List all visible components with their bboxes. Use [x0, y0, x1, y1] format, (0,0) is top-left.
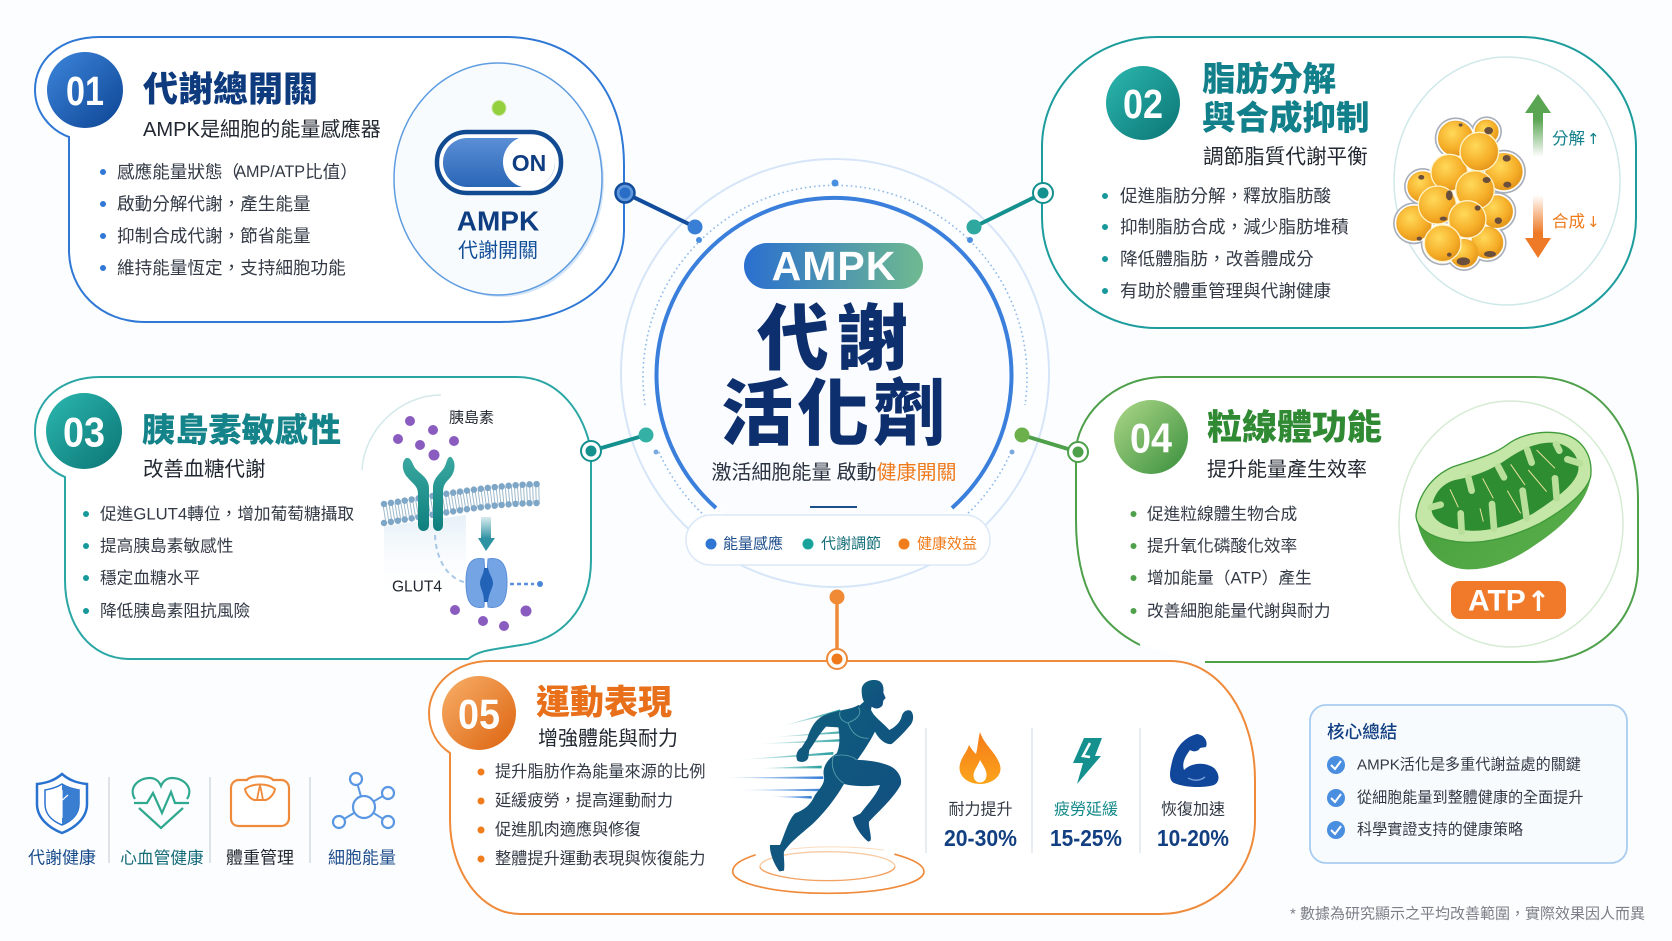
bullets 05	[478, 763, 705, 868]
stat: endurance: 耐力提升	[948, 800, 1013, 818]
panel 04: mitochondria	[1076, 377, 1638, 662]
illustration: AMPK toggle switch: AMPK	[457, 206, 539, 236]
bullets 04	[1130, 504, 1331, 620]
summary row 3: 科學實證支持的健康策略	[1357, 820, 1523, 838]
bullets 04: 增加能量（ATP）產生	[1147, 568, 1312, 588]
illustration: mitochondrion	[1399, 401, 1623, 647]
heading 02	[1202, 60, 1370, 138]
illustration: insulin receptor and GLUT4: GLUT4	[392, 578, 442, 596]
subheading 05: 增強體能與耐力	[538, 727, 678, 750]
heading 03: 胰島素敏感性	[142, 412, 341, 450]
heading 05: 運動表現	[536, 684, 672, 722]
bullets 03: 促進GLUT4轉位，增加葡萄糖攝取	[100, 504, 354, 524]
connector: hub to panel 04	[1014, 428, 1088, 462]
illustration: AMPK toggle switch: 代謝開關	[458, 239, 538, 262]
legend pill: 健康效益	[917, 536, 977, 552]
bullets 05: 延緩疲勞，提高運動耐力	[495, 792, 673, 810]
stat: recovery: 恢復加速	[1161, 800, 1225, 818]
stat: endurance	[944, 732, 1017, 851]
summary row 1: AMPK活化是多重代謝益處的關鍵	[1357, 756, 1581, 774]
bullets 04: 提升氧化磷酸化效率	[1147, 536, 1297, 556]
bullets 05: 提升脂肪作為能量來源的比例	[495, 763, 705, 781]
bullets 02: 抑制脂肪合成，減少脂肪堆積	[1120, 217, 1349, 237]
bullets 03: 降低胰島素阻抗風險	[100, 602, 250, 620]
panel 02: fat breakdown	[1042, 37, 1636, 328]
tagline: 激活細胞能量啟動健康開關	[712, 461, 956, 484]
bullets 02: 降低體脂肪，改善體成分	[1120, 249, 1314, 269]
icon: cell energy molecule	[328, 773, 396, 868]
icon: cardiovascular heart: 心血管健康	[120, 848, 204, 868]
badge 02: 02	[1123, 81, 1163, 127]
connector: hub to panel 03	[581, 428, 654, 461]
connector: hub to panel 01	[616, 184, 702, 234]
stat: fatigue: 疲勞延緩	[1054, 800, 1118, 818]
bullets 02	[1102, 186, 1349, 301]
panel 05: exercise performance	[429, 661, 1255, 914]
stat: endurance: 20-30%	[944, 825, 1017, 851]
heading 04: 粒線體功能	[1207, 408, 1382, 448]
arrow: breakdown up	[1525, 94, 1551, 157]
AMPK pill	[744, 243, 923, 289]
legend pill: 代謝調節	[821, 534, 881, 552]
illustration: insulin receptor and GLUT4	[362, 395, 543, 631]
main title line 1: 代謝	[757, 300, 915, 380]
subheading 02: 調節脂質代謝平衡	[1203, 146, 1368, 168]
bullets 01: 感應能量狀態（AMP/ATP比值）	[117, 162, 358, 182]
icon: weight scale: 體重管理	[226, 848, 294, 868]
arrow: synthesis down	[1525, 195, 1551, 258]
footnote: * 數據為研究顯示之平均改善範圍，實際效果因人而異	[1290, 904, 1645, 922]
badge 03: 03	[63, 408, 105, 456]
bullets 05: 促進肌肉適應與修復	[495, 820, 641, 839]
AMPK pill: AMPK	[772, 243, 896, 289]
stat: fatigue	[1050, 738, 1122, 851]
connector: hub to panel 05	[827, 590, 847, 669]
subheading 01: AMPK是細胞的能量感應器	[143, 117, 381, 141]
badge 01: 01	[66, 68, 104, 114]
panel 03: insulin sensitivity	[35, 377, 591, 659]
icon: cell energy molecule: 細胞能量	[328, 848, 396, 868]
panel 01: metabolic switch	[35, 37, 624, 322]
badge 01	[47, 52, 123, 128]
heading 02: 與合成抑制	[1202, 100, 1370, 138]
illustration: AMPK toggle switch	[394, 63, 604, 297]
bullets 04: 改善細胞能量代謝與耐力	[1147, 602, 1331, 620]
bottom-left icon row	[28, 773, 396, 868]
badge 04	[1114, 400, 1188, 474]
heading 01: 代謝總開關	[143, 70, 318, 110]
subheading 04: 提升能量產生效率	[1207, 458, 1367, 481]
badge 05: 05	[458, 690, 500, 738]
illustration: AMPK toggle switch: ON	[512, 150, 546, 176]
icon: cardiovascular heart	[120, 778, 204, 868]
label: breakdown: 分解↑	[1552, 129, 1600, 148]
connector: hub to panel 02	[966, 183, 1053, 234]
legend pill	[686, 515, 990, 565]
bullets 02: 有助於體重管理與代謝健康	[1120, 281, 1331, 301]
icon: weight scale	[226, 776, 294, 868]
bullets 04: 促進粒線體生物合成	[1147, 504, 1297, 524]
bullets 05: 整體提升運動表現與恢復能力	[495, 850, 705, 868]
badge: ATP up	[1451, 581, 1566, 619]
bullets 01: 啟動分解代謝，產生能量	[117, 194, 311, 214]
illustration: insulin receptor and GLUT4: 胰島素	[449, 410, 494, 426]
badge 04: 04	[1130, 414, 1173, 462]
bullets 01	[100, 162, 358, 278]
bullets 01: 抑制合成代謝，節省能量	[117, 226, 311, 246]
badge 05	[442, 676, 516, 750]
stat: recovery: 10-20%	[1157, 825, 1229, 851]
icon: metabolic health shield: 代謝健康	[28, 848, 96, 868]
icon: metabolic health shield	[28, 774, 96, 868]
stat dividers	[926, 728, 1140, 853]
main title line 2: 活化劑	[721, 375, 949, 455]
center hub	[621, 159, 1049, 587]
stat: recovery	[1157, 734, 1229, 851]
bullets 02: 促進脂肪分解，釋放脂肪酸	[1120, 186, 1332, 206]
legend pill: 能量感應	[723, 534, 783, 552]
label: synthesis: 合成↓	[1552, 212, 1600, 231]
stat: fatigue: 15-25%	[1050, 825, 1122, 851]
core summary box	[1310, 705, 1627, 863]
illustration: fat cell cluster	[1393, 57, 1620, 305]
summary heading: 核心總結	[1327, 722, 1397, 742]
badge: ATP up: ATP↑	[1468, 584, 1550, 618]
bullets 01: 維持能量恆定，支持細胞功能	[117, 258, 346, 278]
bullets 03	[83, 504, 354, 620]
illustration: runner	[720, 680, 924, 893]
badge 03	[46, 393, 122, 469]
subheading 03: 改善血糖代謝	[143, 458, 265, 481]
bullets 03: 提高胰島素敏感性	[100, 536, 234, 556]
bullets 03: 穩定血糖水平	[100, 568, 200, 588]
badge 02	[1106, 66, 1180, 140]
summary row 2: 從細胞能量到整體健康的全面提升	[1357, 790, 1583, 806]
heading 02: 脂肪分解	[1202, 60, 1336, 98]
